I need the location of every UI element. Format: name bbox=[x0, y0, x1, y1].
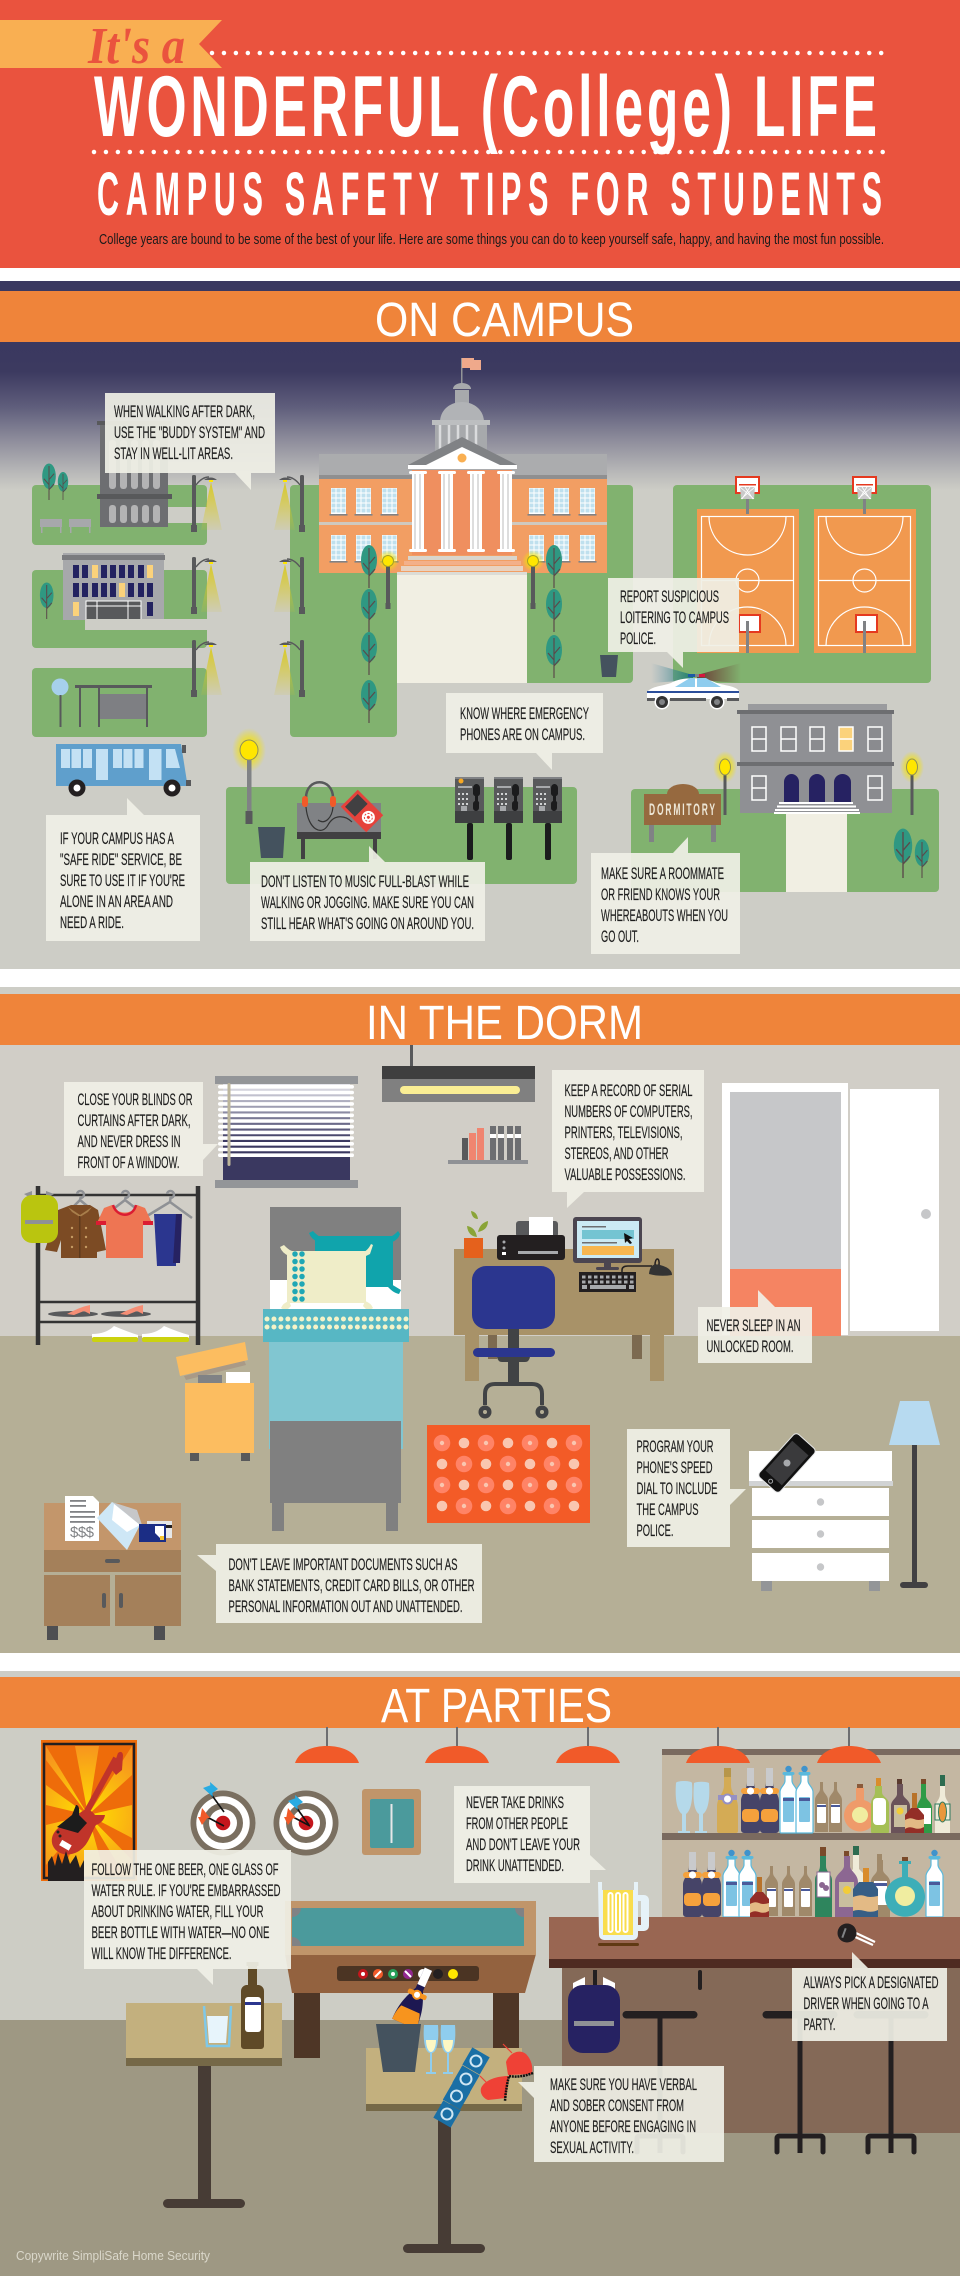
icon: cabinet with documents: $$$ bbox=[70, 1524, 95, 1541]
callout: drinks: FROM OTHER PEOPLE bbox=[466, 1815, 568, 1833]
section heading: in the dorm bbox=[0, 987, 960, 1050]
callout: consent: MAKE SURE YOU HAVE VERBAL bbox=[550, 2076, 697, 2094]
icon: car key bbox=[838, 1924, 875, 1945]
dotted rule top bbox=[212, 51, 885, 55]
callout: emergency phones: KNOW WHERE EMERGENCY bbox=[460, 705, 589, 723]
callout: documents: PERSONAL INFORMATION OUT AND UNATTENDED. bbox=[228, 1598, 462, 1616]
callout: suspicious loitering: LOITERING TO CAMPUS bbox=[620, 609, 729, 627]
callout: blinds: CLOSE YOUR BLINDS OR bbox=[78, 1091, 193, 1109]
callout: blinds: AND NEVER DRESS IN bbox=[78, 1133, 180, 1151]
section heading: in the dorm: IN THE DORM bbox=[366, 997, 643, 1050]
callout: roommate: GO OUT. bbox=[601, 928, 639, 946]
icon: trees and benches bbox=[40, 463, 91, 533]
title: WONDERFUL (College) LIFE bbox=[94, 60, 877, 155]
header background bbox=[0, 0, 960, 268]
callout: music: WALKING OR JOGGING. MAKE SURE YOU CAN bbox=[261, 894, 474, 912]
icon: desk chair bbox=[472, 1266, 555, 1418]
callout: one beer rule: FOLLOW THE ONE BEER, ONE GLASS OF bbox=[92, 1861, 278, 1879]
callout: consent: SEXUAL ACTIVITY. bbox=[550, 2139, 634, 2157]
icon: emergency phones bbox=[455, 777, 562, 860]
callout: serial numbers bbox=[552, 1070, 704, 1208]
icon: stools bbox=[622, 1970, 928, 2153]
icon: bar back wall bbox=[562, 1749, 960, 2133]
callout: blinds bbox=[64, 1082, 218, 1176]
keyboard bbox=[579, 1272, 636, 1292]
path between lawns bbox=[168, 507, 207, 523]
callout: one beer rule: WILL KNOW THE DIFFERENCE. bbox=[92, 1945, 232, 1963]
icon: courtyard lamps and trees bbox=[361, 545, 618, 723]
panel: dorm scene bbox=[0, 1045, 960, 1653]
icon: street lamps bbox=[191, 475, 305, 697]
icon: basketball courts bbox=[697, 477, 916, 653]
callout: safe ride: NEED A RIDE. bbox=[60, 914, 124, 932]
icon: police car bbox=[647, 663, 741, 710]
icon: clothing rack bbox=[21, 1186, 198, 1345]
callout: one beer rule: ABOUT DRINKING WATER, FILL YOUR bbox=[92, 1903, 264, 1921]
icon: bottles top shelf bbox=[676, 1766, 950, 1833]
ribbon: It's a bbox=[0, 18, 222, 75]
icon: bed bbox=[263, 1207, 409, 1531]
callout: drinks: DRINK UNATTENDED. bbox=[466, 1857, 564, 1875]
callout: buddy system: WHEN WALKING AFTER DARK, bbox=[114, 403, 255, 421]
callout: speed dial: THE CAMPUS bbox=[636, 1501, 699, 1519]
callout: drinks: NEVER TAKE DRINKS bbox=[466, 1794, 564, 1812]
callout: drinks bbox=[454, 1786, 606, 1883]
callout: designated driver bbox=[792, 1952, 947, 2041]
panel: on campus scene bbox=[0, 342, 960, 969]
mouse bbox=[622, 1259, 672, 1276]
callout: one beer rule bbox=[84, 1850, 291, 1985]
callout: unlocked room: UNLOCKED ROOM. bbox=[706, 1338, 794, 1356]
dome bbox=[432, 358, 490, 455]
callout: suspicious loitering: POLICE. bbox=[620, 630, 656, 648]
section heading: at parties bbox=[0, 1671, 960, 1733]
callout: roommate: OR FRIEND KNOWS YOUR bbox=[601, 886, 720, 904]
callout: music: DON'T LISTEN TO MUSIC FULL-BLAST WHILE bbox=[261, 873, 469, 891]
callout: serial numbers: STEREOS, AND OTHER bbox=[564, 1145, 669, 1163]
icon: pendant lamps bbox=[295, 1727, 881, 1763]
icon: main hall bbox=[319, 358, 607, 683]
callout: speed dial: PROGRAM YOUR bbox=[636, 1438, 714, 1456]
icon: dorm lamps, trees, sign bbox=[644, 751, 929, 878]
callout: emergency phones bbox=[446, 693, 603, 770]
callout: roommate: MAKE SURE A ROOMMATE bbox=[601, 865, 724, 883]
callout: one beer rule: WATER RULE. IF YOU'RE EMBARRASSED bbox=[92, 1882, 281, 1900]
callout: documents bbox=[197, 1544, 482, 1623]
callout: safe ride: IF YOUR CAMPUS HAS A bbox=[60, 830, 174, 848]
icon: nightstand bbox=[749, 1432, 893, 1591]
plant bbox=[464, 1211, 488, 1258]
icon: ceiling light bbox=[382, 1045, 535, 1102]
callout: suspicious loitering: REPORT SUSPICIOUS bbox=[620, 588, 719, 606]
callout: documents: DON'T LEAVE IMPORTANT DOCUMENTS SUCH AS bbox=[228, 1556, 458, 1574]
icon: lamp and trash can bbox=[232, 728, 285, 858]
callout: drinks: AND DON'T LEAVE YOUR bbox=[466, 1836, 580, 1854]
icon: door bbox=[722, 1083, 939, 1336]
icon: condom strip bbox=[433, 2047, 490, 2128]
icon: bus stop bbox=[52, 678, 152, 727]
callout: roommate bbox=[591, 837, 740, 954]
icon: floor lamp bbox=[889, 1401, 940, 1588]
icon: dartboard two bbox=[274, 1790, 338, 1856]
icon: cabinet with documents bbox=[44, 1496, 181, 1640]
icon: dormitory building bbox=[737, 704, 894, 892]
printer bbox=[497, 1217, 565, 1260]
callout: documents: BANK STATEMENTS, CREDIT CARD BILLS, OR OTHER bbox=[228, 1577, 475, 1595]
callout: blinds: CURTAINS AFTER DARK, bbox=[78, 1112, 190, 1130]
callout: serial numbers: VALUABLE POSSESSIONS. bbox=[564, 1166, 686, 1184]
icon: storage box bbox=[176, 1342, 254, 1461]
icon: classical building bbox=[97, 421, 172, 527]
monitor bbox=[573, 1217, 642, 1270]
icon: beer mug bbox=[598, 1882, 649, 1946]
callout: speed dial: DIAL TO INCLUDE bbox=[636, 1480, 718, 1498]
callout: unlocked room: NEVER SLEEP IN AN bbox=[706, 1317, 800, 1335]
icon: champagne flutes bbox=[424, 2025, 455, 2074]
callout: speed dial: PHONE'S SPEED bbox=[636, 1459, 713, 1477]
hangers bbox=[70, 1191, 192, 1218]
icon: framed picture bbox=[362, 1789, 421, 1855]
icon: bottles bottom shelf bbox=[683, 1846, 943, 1917]
panel: party scene bbox=[0, 1727, 960, 2276]
callout: roommate: WHEREABOUTS WHEN YOU bbox=[601, 907, 728, 925]
icon: bookshelf bbox=[448, 1126, 528, 1164]
callout: buddy system: STAY IN WELL-LIT AREAS. bbox=[114, 445, 233, 463]
callout: buddy system: USE THE "BUDDY SYSTEM" AND bbox=[114, 424, 265, 442]
callout: emergency phones: PHONES ARE ON CAMPUS. bbox=[460, 726, 585, 744]
icon: table with headphones and music player bbox=[297, 782, 383, 859]
callout: consent: AND SOBER CONSENT FROM bbox=[550, 2097, 684, 2115]
icon: pool table bbox=[285, 1901, 536, 2058]
callout: blinds: FRONT OF A WINDOW. bbox=[78, 1154, 180, 1172]
callout: consent: ANYONE BEFORE ENGAGING IN bbox=[550, 2118, 696, 2136]
callout: music: STILL HEAR WHAT'S GOING ON AROUND YOU. bbox=[261, 915, 474, 933]
copyright note: Copywrite SimpliSafe Home Security bbox=[16, 2248, 211, 2263]
callout: safe ride: ALONE IN AN AREA AND bbox=[60, 893, 173, 911]
callout: serial numbers: NUMBERS OF COMPUTERS, bbox=[564, 1103, 692, 1121]
callout: safe ride: "SAFE RIDE" SERVICE, BE bbox=[60, 851, 182, 869]
icon: poster bbox=[41, 1740, 137, 1881]
callout: serial numbers: PRINTERS, TELEVISIONS, bbox=[564, 1124, 682, 1142]
icon: beer bottle bbox=[241, 1962, 264, 2049]
section heading: on campus bbox=[0, 291, 960, 347]
callout: suspicious loitering bbox=[608, 578, 739, 668]
icon: dorm lamps, trees, sign: DORMITORY bbox=[649, 800, 715, 819]
callout: music bbox=[250, 846, 485, 941]
icon: backpack on bar bbox=[568, 1970, 620, 2053]
icon: window with blinds bbox=[215, 1076, 358, 1188]
icon: desk bbox=[454, 1211, 674, 1381]
callout: safe ride: SURE TO USE IT IF YOU'RE bbox=[60, 872, 185, 890]
icon: polka-dot rug bbox=[427, 1425, 590, 1523]
dotted rule bottom bbox=[94, 150, 885, 154]
icon: bar counter bbox=[549, 1917, 960, 1968]
icon: bus bbox=[56, 744, 191, 796]
callout: speed dial bbox=[627, 1429, 746, 1547]
icon: dartboard one bbox=[190, 1782, 256, 1856]
icon: right bar table bbox=[366, 2048, 522, 2253]
callout: one beer rule: BEER BOTTLE WITH WATER—NO ONE bbox=[92, 1924, 270, 1942]
green lawn patches bbox=[32, 485, 939, 892]
callout: buddy system bbox=[105, 393, 275, 490]
callout: safe ride bbox=[46, 798, 200, 941]
callout: consent bbox=[518, 2066, 724, 2162]
ribbon: It's a: It's a bbox=[87, 18, 185, 75]
callout: serial numbers: KEEP A RECORD OF SERIAL bbox=[564, 1082, 692, 1100]
callout: unlocked room bbox=[698, 1290, 812, 1363]
subtitle: CAMPUS SAFETY TIPS FOR STUDENTS bbox=[97, 161, 882, 229]
icon: bra bbox=[480, 2044, 533, 2101]
icon: office building bbox=[40, 553, 207, 630]
section heading: on campus: ON CAMPUS bbox=[375, 294, 634, 347]
section heading: at parties: AT PARTIES bbox=[381, 1680, 612, 1733]
icon: champagne in bucket bbox=[376, 1964, 440, 2072]
callout: speed dial: POLICE. bbox=[636, 1522, 674, 1540]
navy divider bbox=[0, 281, 960, 291]
icon: left bar table bbox=[126, 2003, 282, 2208]
callout: designated driver: PARTY. bbox=[804, 2016, 836, 2034]
